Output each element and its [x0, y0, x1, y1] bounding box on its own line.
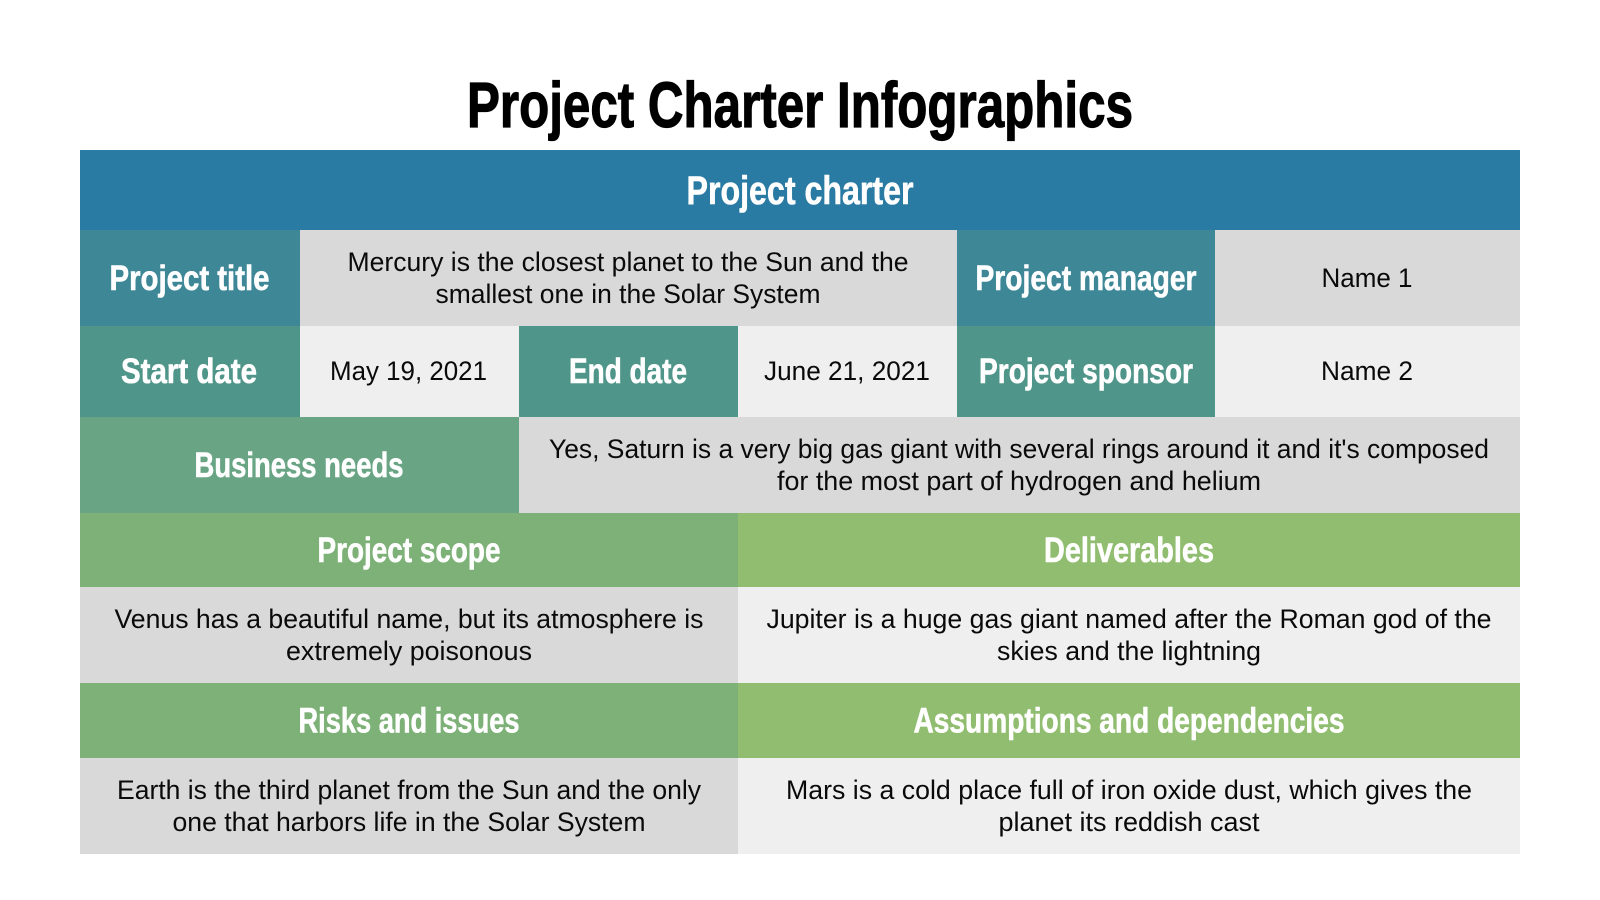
cell: project title label: Project title	[110, 259, 270, 298]
text: deliverables: skies and the lightning	[997, 636, 1261, 666]
heading: assumptions and dependencies	[738, 683, 1520, 758]
cell: business needs label	[80, 417, 519, 513]
heading: project charter: Project charter	[686, 169, 914, 213]
cell: project sponsor name: Name 2	[1321, 356, 1413, 386]
cell: end date value: June 21, 2021	[764, 356, 930, 386]
cell: project manager label	[957, 230, 1215, 326]
text: project scope: extremely poisonous	[286, 636, 532, 666]
text: assumptions and dependencies: planet its reddish cast	[998, 807, 1260, 837]
cell: project title label	[80, 230, 300, 326]
heading: deliverables	[738, 513, 1520, 587]
cell: business needs text	[519, 417, 1520, 513]
cell: project title text: Mercury is the closest planet to the Sun and the	[348, 247, 908, 277]
cell: project sponsor name	[1215, 326, 1520, 417]
title: Project Charter Infographics	[467, 69, 1133, 141]
text: assumptions and dependencies	[738, 758, 1520, 854]
cell: project sponsor label: Project sponsor	[979, 352, 1193, 391]
cell: start date value	[300, 326, 519, 417]
heading: project scope	[80, 513, 738, 587]
text: project scope: Venus has a beautiful name, but its atmosphere is	[114, 604, 704, 634]
panel: project charter table	[80, 150, 1520, 854]
cell: start date label: Start date	[121, 352, 257, 391]
text: risks and issues: Earth is the third planet from the Sun and the only	[117, 775, 701, 805]
cell: project manager name: Name 1	[1322, 263, 1412, 293]
cell: project title text	[300, 230, 957, 326]
heading: deliverables: Deliverables	[1044, 531, 1214, 570]
text: assumptions and dependencies: Mars is a cold place full of iron oxide dust, which gives the	[786, 775, 1472, 805]
cell: end date label: End date	[569, 352, 687, 391]
heading: project scope: Project scope	[318, 531, 500, 570]
cell: end date label	[519, 326, 738, 417]
cell: business needs text: for the most part of hydrogen and helium	[777, 466, 1261, 496]
heading: risks and issues: Risks and issues	[298, 702, 520, 740]
cell: business needs text: Yes, Saturn is a very big gas giant with several rings around it and it's composed	[549, 434, 1489, 464]
text: deliverables	[738, 587, 1520, 683]
heading: project charter	[80, 150, 1520, 230]
cell: project sponsor label	[957, 326, 1215, 417]
cell: end date value	[738, 326, 957, 417]
heading: assumptions and dependencies: Assumptions and dependencies	[914, 702, 1344, 740]
cell: start date label	[80, 326, 300, 417]
cell: business needs label: Business needs	[194, 446, 404, 485]
text: project scope	[80, 587, 738, 683]
cell: project manager name	[1215, 230, 1520, 326]
text: risks and issues: one that harbors life in the Solar System	[172, 807, 646, 837]
text: deliverables: Jupiter is a huge gas giant named after the Roman god of the	[766, 604, 1492, 634]
cell: start date value: May 19, 2021	[330, 356, 487, 386]
text: risks and issues	[80, 758, 738, 854]
heading: risks and issues	[80, 683, 738, 758]
cell: project title text: smallest one in the Solar System	[436, 279, 820, 309]
cell: project manager label: Project manager	[976, 259, 1197, 298]
